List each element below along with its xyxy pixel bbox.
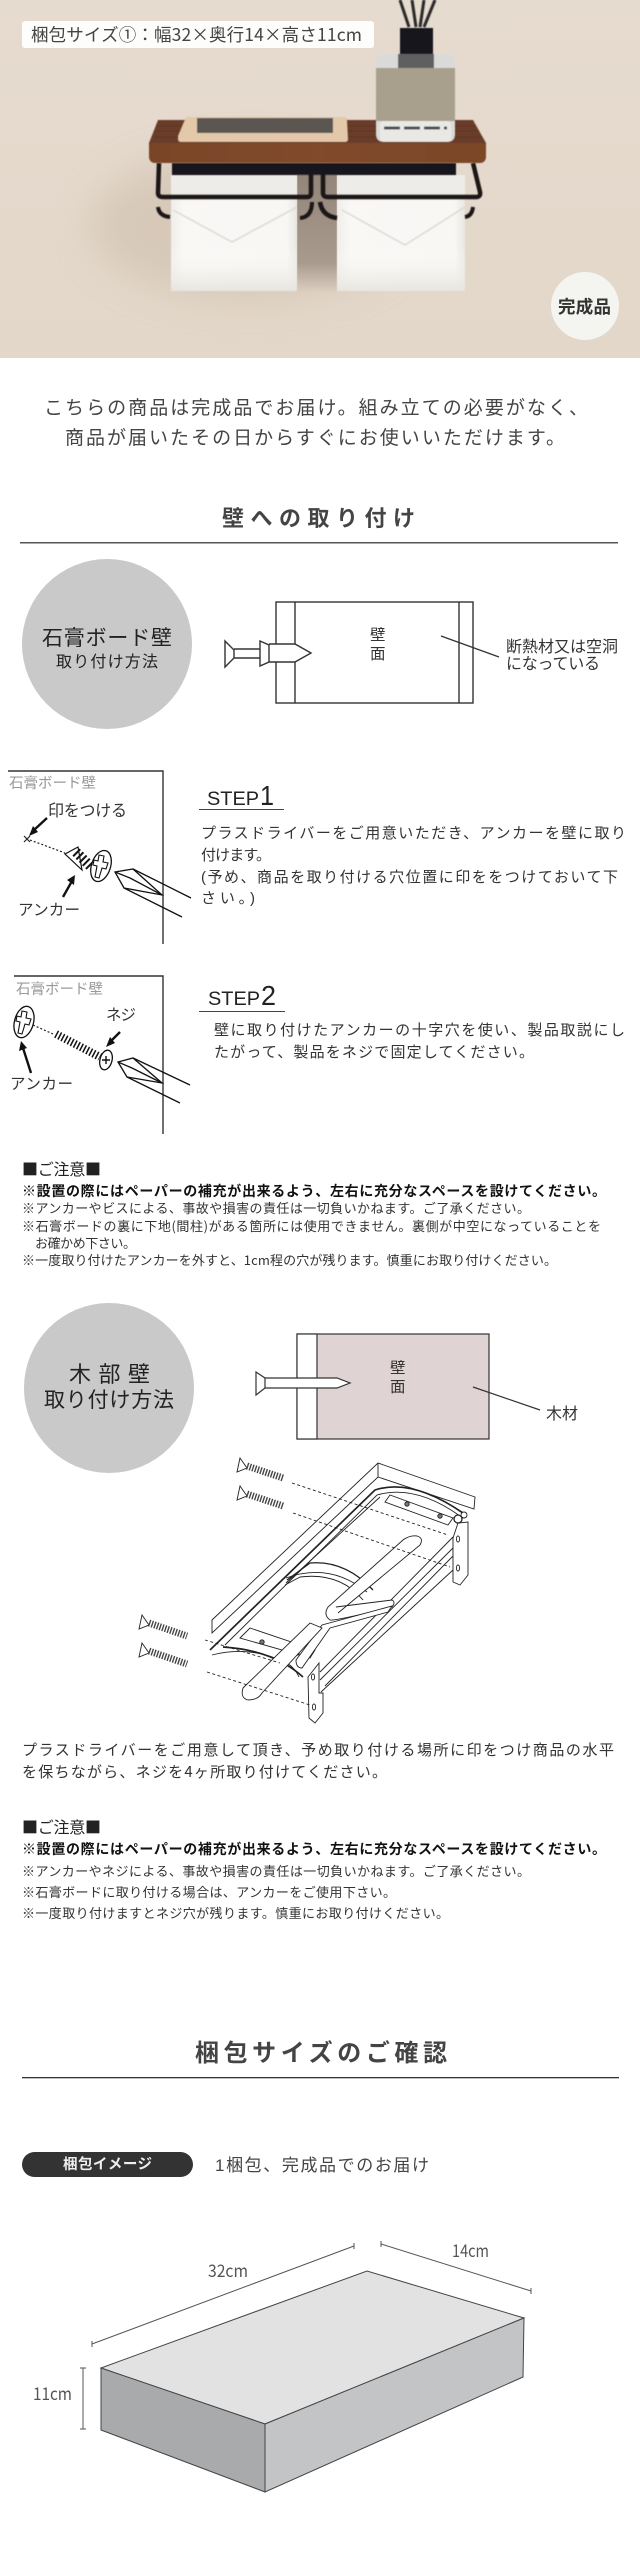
notes: plasterboard: お確かめ下さい。 bbox=[35, 1233, 136, 1252]
step 2 text: 壁に取り付けたアンカーの十字穴を使い、製品取説にし bbox=[214, 1022, 625, 1039]
package image pill: 梱包イメージ bbox=[63, 2155, 152, 2173]
notes: wooden wall: ※一度取り付けますとネジ穴が残ります。慎重にお取り付けください。 bbox=[22, 1903, 449, 1922]
heading: package size: 梱包サイズのご確認 bbox=[195, 2039, 447, 2067]
notes: plasterboard: ※設置の際にはペーパーの補充が出来るよう、左右に充分なスペースを設けてください。 bbox=[22, 1181, 606, 1201]
step 1 heading bbox=[199, 780, 284, 811]
diagram: wooden wall section: 面 bbox=[390, 1379, 406, 1396]
illustration: step 1: 石膏ボード壁 bbox=[9, 775, 96, 792]
notes: wooden wall: ※石膏ボードに取り付ける場合は、アンカーをご使用下さい。 bbox=[22, 1882, 396, 1901]
illustration: step 1 bbox=[8, 771, 191, 944]
badge: finished product bbox=[551, 272, 619, 340]
wall shadow bbox=[90, 150, 410, 300]
mount brackets bbox=[385, 1495, 453, 1525]
step 2 heading: STEP bbox=[208, 989, 260, 1010]
notes: plasterboard: ※アンカーやビスによる、事故や損害の責任は一切負いかねます。ご了承ください。 bbox=[22, 1198, 530, 1217]
illustration: holder mounting view bbox=[139, 1458, 475, 1723]
dimension: 11cm: 11cm bbox=[33, 2380, 72, 2405]
circle: plasterboard wall: 石膏ボード壁 bbox=[42, 627, 172, 650]
step 2 text: たがって、製品をネジで固定してください。 bbox=[214, 1044, 534, 1061]
diagram: wooden wall section bbox=[256, 1334, 578, 1439]
circle: wooden wall: 木部壁 bbox=[69, 1362, 150, 1387]
box top bbox=[101, 2271, 524, 2424]
wood wall instructions: を保ちながら、ネジを4ヶ所取り付けてください。 bbox=[22, 1761, 387, 1782]
intro text: 商品が届いたその日からすぐにお使いいただけます。 bbox=[65, 427, 565, 449]
product photo bbox=[0, 0, 640, 358]
toilet paper rolls bbox=[171, 175, 465, 291]
notes: plasterboard: ※一度取り付けたアンカーを外すと、1cm程の穴が残ります。慎重にお取り付けください。 bbox=[22, 1250, 557, 1269]
arcs bbox=[287, 1563, 373, 1590]
size label: 梱包サイズ①：幅32×奥行14×高さ11cm bbox=[31, 22, 362, 47]
step 2 text bbox=[214, 1022, 625, 1061]
holder rods bbox=[326, 1536, 421, 1620]
intro text: こちらの商品は完成品でお届け。組み立ての必要がなく、 bbox=[44, 397, 588, 419]
circle: plasterboard wall bbox=[22, 559, 192, 729]
dimension: 32cm: 32cm bbox=[208, 2257, 248, 2282]
step 1 text: さい。) bbox=[201, 890, 255, 907]
package image pill bbox=[22, 2152, 193, 2177]
wood wall instructions: プラスドライバーをご用意して頂き、予め取り付ける場所に印をつけ商品の水平 bbox=[22, 1739, 614, 1760]
illustration: step 2: 石膏ボード壁 bbox=[16, 981, 103, 998]
package box diagram bbox=[33, 2237, 531, 2492]
side plates bbox=[453, 1522, 468, 1585]
dashed guides bbox=[205, 1483, 450, 1705]
wall plate rails bbox=[210, 1487, 463, 1650]
diagram: plasterboard wall section: 断熱材又は空洞 bbox=[506, 638, 618, 656]
badge: finished product: 完成品 bbox=[558, 297, 611, 317]
gap between rolls bbox=[297, 175, 337, 292]
intro text bbox=[44, 397, 588, 449]
notes: wooden wall bbox=[22, 1814, 606, 1922]
notes: plasterboard: ■ご注意■ bbox=[22, 1156, 101, 1180]
step 1 text: プラスドライバーをご用意いただき、アンカーを壁に取り bbox=[201, 825, 626, 842]
illustration: step 2: アンカー bbox=[10, 1076, 73, 1093]
screw: lower 2 bbox=[139, 1643, 187, 1664]
shelf board bbox=[212, 1463, 475, 1633]
diagram: plasterboard wall section: 壁 bbox=[370, 626, 386, 644]
wood wall instructions bbox=[22, 1739, 614, 1782]
diagram: plasterboard wall section bbox=[225, 602, 618, 703]
box left face bbox=[101, 2368, 265, 2492]
package note: 1梱包、完成品でのお届け bbox=[215, 2156, 429, 2175]
diagram: plasterboard wall section: 面 bbox=[370, 646, 386, 663]
diagram: wooden wall section: 木材 bbox=[546, 1405, 578, 1423]
step 2 heading: 2 bbox=[261, 980, 276, 1011]
notes: wooden wall: ■ご注意■ bbox=[22, 1814, 101, 1838]
diagram: plasterboard wall section: になっている bbox=[506, 655, 600, 673]
step 1 heading: 1 bbox=[260, 780, 274, 811]
wooden shelf bbox=[149, 120, 486, 163]
dimension: 14cm bbox=[381, 2237, 531, 2294]
diagram: wooden wall section: 壁 bbox=[390, 1359, 406, 1377]
step 1 heading: STEP bbox=[207, 789, 259, 810]
circle: wooden wall bbox=[24, 1303, 194, 1473]
notes: plasterboard: ※石膏ボードの裏に下地(間柱)がある箇所には使用できません。裏側が中空になっていることを bbox=[22, 1216, 601, 1235]
step 1 text: 付けます。 bbox=[201, 847, 271, 864]
screw: upper 2 bbox=[237, 1486, 283, 1506]
box right face bbox=[265, 2318, 524, 2492]
notes: wooden wall: ※アンカーやネジによる、事故や損害の責任は一切負いかねます。ご了承ください。 bbox=[22, 1861, 530, 1880]
illustration: step 1: アンカー bbox=[18, 902, 80, 919]
black metal frame bbox=[158, 163, 480, 218]
step 1 text bbox=[201, 825, 626, 907]
step 1 text: (予め、商品を取り付ける穴位置に印ををつけておいて下 bbox=[201, 869, 618, 886]
dimension: 32cm bbox=[92, 2243, 354, 2347]
diffuser bottle bbox=[376, 0, 455, 142]
circle: wooden wall: 取り付け方法 bbox=[44, 1389, 174, 1412]
step 2 heading bbox=[199, 980, 285, 1012]
screw: upper 1 bbox=[237, 1458, 283, 1478]
dimension: 14cm: 14cm bbox=[452, 2237, 489, 2262]
illustration: step 1: 印をつける bbox=[48, 802, 127, 820]
notes: wooden wall: ※設置の際にはペーパーの補充が出来るよう、左右に充分なスペースを設けてください。 bbox=[22, 1839, 606, 1859]
notes: plasterboard bbox=[22, 1156, 606, 1269]
circle: plasterboard wall: 取り付け方法 bbox=[56, 653, 158, 671]
dimension: 11cm bbox=[33, 2368, 86, 2429]
heading: wall mounting: 壁への取り付け bbox=[222, 506, 415, 531]
illustration: step 2: ネジ bbox=[106, 1006, 136, 1024]
illustration: step 2 bbox=[10, 976, 190, 1134]
phone on shelf bbox=[178, 117, 348, 142]
screw: lower 1 bbox=[139, 1615, 187, 1636]
